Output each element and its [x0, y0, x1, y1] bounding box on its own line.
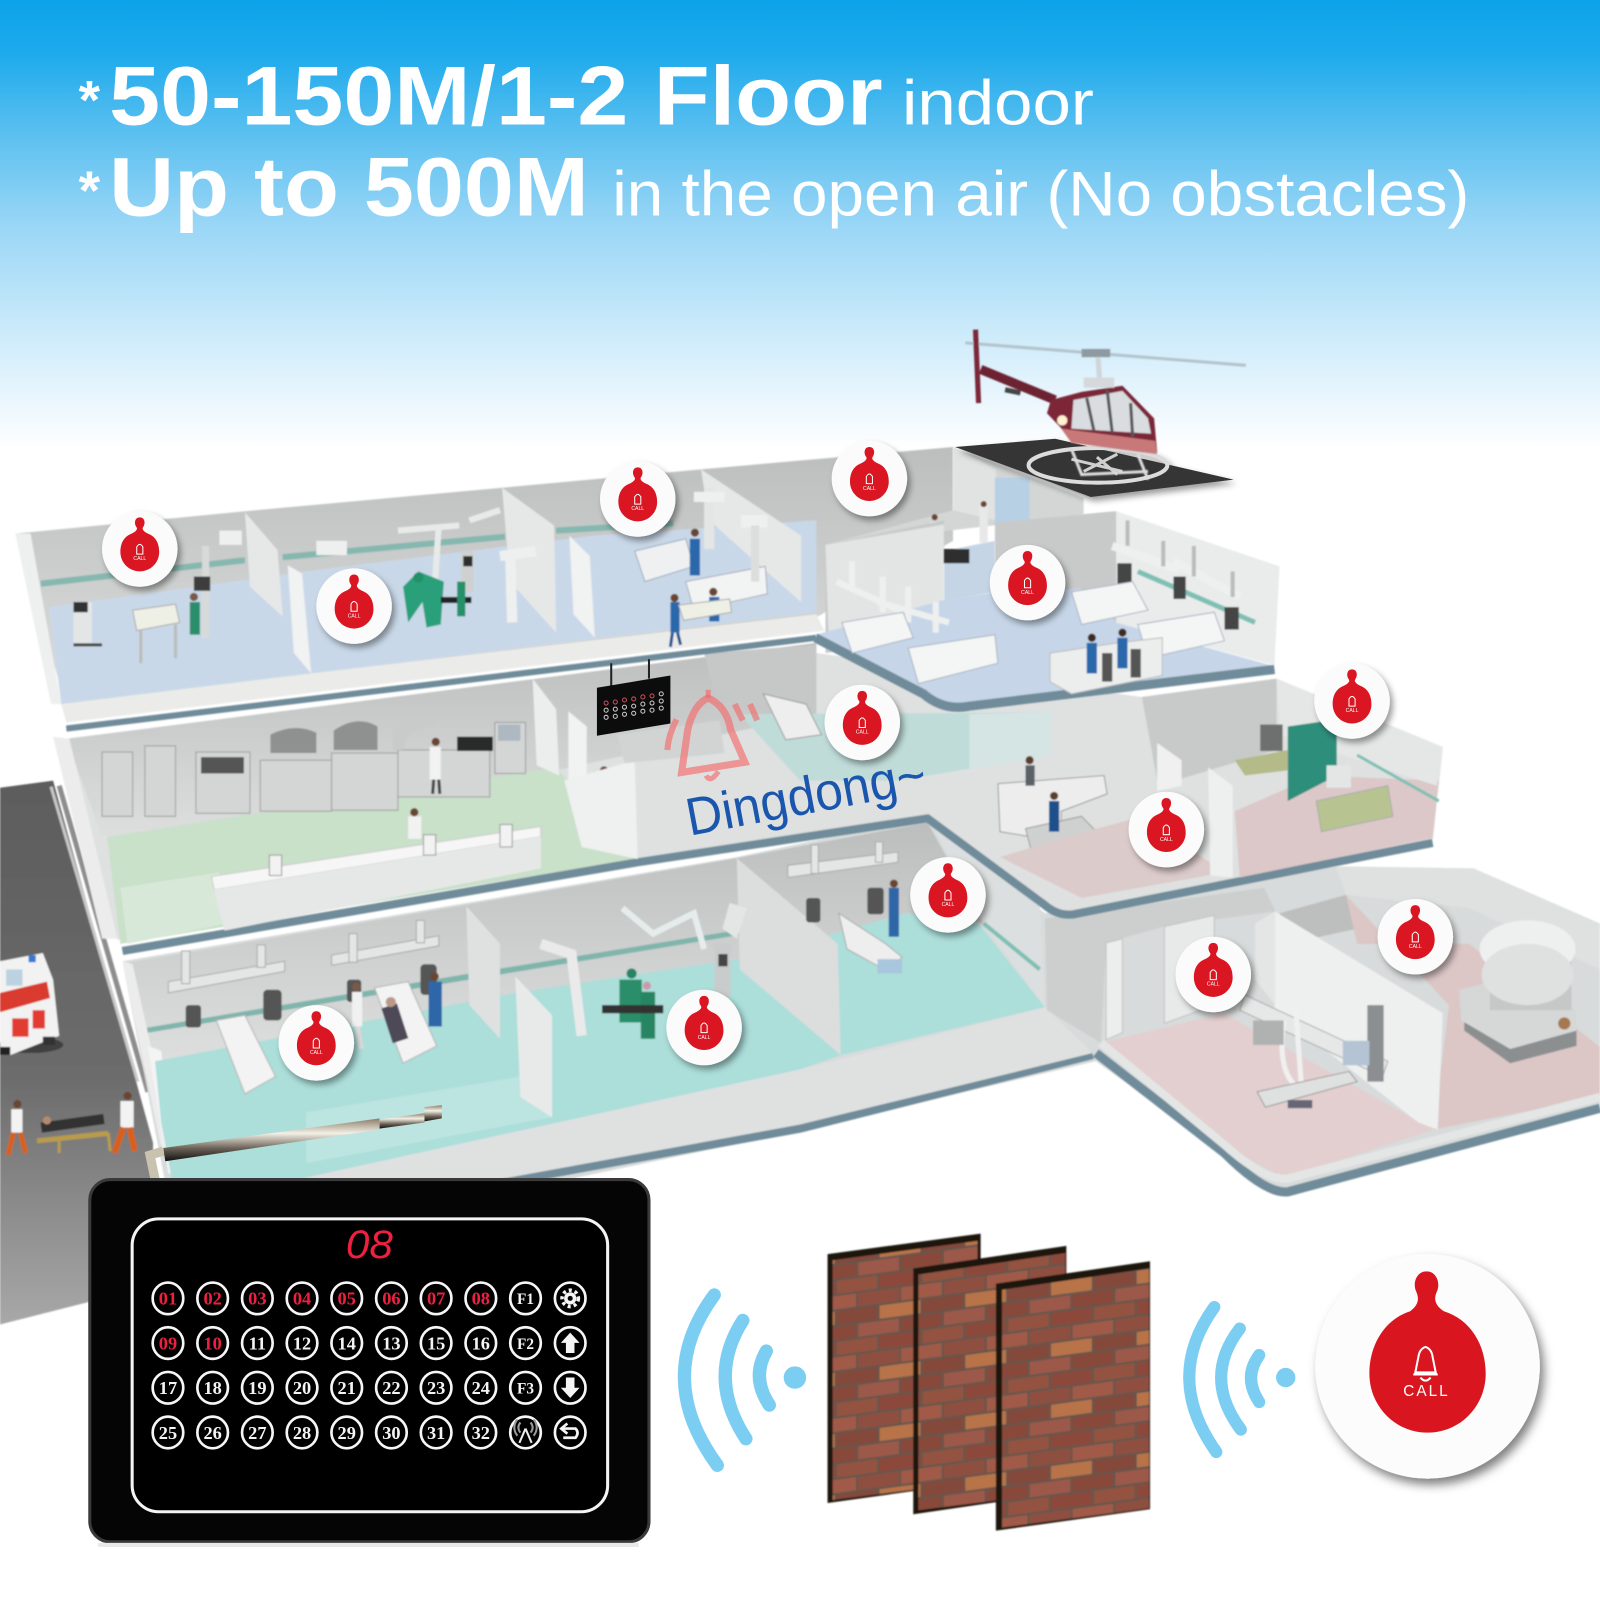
heading: range specifications: [79, 48, 1469, 233]
button labels idle: 32: [472, 1423, 490, 1443]
patient beds: [216, 913, 902, 1094]
button labels idle: 30: [382, 1423, 401, 1443]
blue floor: [49, 520, 816, 704]
road and ambulance area: [0, 781, 153, 1324]
button labels active: 02: [203, 1289, 222, 1309]
call button 2: [316, 568, 392, 644]
icon: return arrow: [561, 1423, 578, 1438]
button labels active: 05: [338, 1289, 356, 1309]
call button 9: CALL: [942, 902, 954, 908]
button labels active: 10: [203, 1333, 222, 1353]
call button 7: CALL: [1346, 708, 1359, 714]
brick wall 3: [996, 1261, 1150, 1531]
building: icu wing: [815, 511, 1280, 708]
heading: range specifications: 50-150M/1-2 Floor: [109, 48, 883, 142]
call button 1: [102, 511, 178, 587]
nurse desk: [1050, 629, 1162, 694]
teal floor: [155, 913, 1045, 1189]
ceiling booms: [837, 520, 1240, 633]
button labels idle: 26: [203, 1423, 222, 1443]
partitions: [245, 469, 801, 673]
button labels idle: 14: [338, 1333, 356, 1353]
icon: up arrow: [561, 1333, 580, 1353]
call button 6: CALL: [856, 730, 869, 736]
middle partitions: [533, 645, 816, 859]
call button 5: [990, 545, 1065, 620]
button labels idle: 16: [472, 1333, 490, 1353]
brick wall panels: [828, 1234, 1150, 1531]
button labels idle: 19: [248, 1378, 267, 1398]
button labels idle: F2: [517, 1336, 534, 1353]
heading: range specifications: in the open air (No obstacles): [612, 159, 1469, 229]
button labels idle: 20: [293, 1378, 311, 1398]
teal wall stripes: [41, 523, 673, 584]
signal waves from receiver: [684, 1295, 806, 1465]
pink treatment rooms: [1000, 679, 1443, 898]
staff figures: [352, 880, 899, 1049]
button labels active: 06: [382, 1289, 401, 1309]
sky gradient background: [0, 0, 1600, 449]
button labels idle: 15: [427, 1333, 445, 1353]
heading: range specifications: *: [79, 68, 101, 130]
button labels active: 01: [159, 1289, 177, 1309]
right wing walls and corridor: [1045, 888, 1276, 1043]
icu room 3: [635, 488, 767, 647]
building: middle floor: [53, 643, 1443, 951]
large call button: [1315, 1254, 1540, 1479]
reception counter: [211, 824, 541, 931]
call button 8: [1129, 792, 1204, 867]
building: top floor left wing: [15, 447, 953, 729]
call button 10: CALL: [1207, 982, 1220, 988]
heading: range specifications: *: [79, 159, 101, 221]
signal waves from call button: [1189, 1307, 1295, 1452]
button labels idle: 31: [427, 1423, 445, 1443]
call button 11: CALL: [1409, 944, 1422, 950]
call button 10: [1176, 937, 1251, 1012]
button labels idle: 27: [248, 1423, 267, 1443]
icon: antenna signal: [514, 1419, 537, 1443]
green floor: [107, 767, 635, 944]
button labels idle: 24: [472, 1378, 490, 1398]
receiver on the wall: [597, 659, 670, 736]
glass room with bed: [740, 694, 1051, 781]
lab equipment: [102, 722, 526, 816]
icon: ambulance: [0, 953, 63, 1055]
button labels idle: 25: [159, 1423, 177, 1443]
left wall: [53, 737, 117, 939]
icon: paramedics with stretcher: [8, 1092, 135, 1155]
call button 4: [832, 441, 907, 516]
slab edge: [122, 818, 1433, 951]
surgery team and lights: [541, 903, 747, 1039]
button labels active: [159, 1289, 490, 1353]
button labels idle: 12: [293, 1333, 311, 1353]
call button 13: CALL: [698, 1035, 711, 1041]
icon: x-ray machine: [1240, 995, 1388, 1108]
icu beds: [842, 582, 1224, 684]
back wall: [124, 822, 984, 1061]
button labels idle: 17: [159, 1378, 177, 1398]
button labels idle: 29: [338, 1423, 356, 1443]
icon: ringing bell: [667, 690, 757, 779]
nurse station: [998, 756, 1122, 893]
call button 3: CALL: [631, 506, 644, 512]
button labels idle: 28: [293, 1423, 311, 1443]
dingdong label: Dingdong~: [681, 745, 931, 848]
icon: bell: [1413, 1347, 1438, 1381]
large call button: CALL: [1403, 1383, 1450, 1400]
low partition panels: [1106, 911, 1443, 1130]
corridor front edge: [296, 1055, 1093, 1220]
button labels idle: 21: [338, 1378, 356, 1398]
left wall: [122, 961, 173, 1148]
building: office behind icu: [826, 447, 1116, 602]
heading: range specifications: indoor: [902, 68, 1094, 138]
button grid: [153, 1283, 586, 1448]
icon: helicopter: [965, 330, 1246, 480]
call button 12: [279, 1005, 354, 1081]
call button 12: CALL: [310, 1050, 323, 1056]
call button 1: CALL: [133, 556, 146, 562]
button labels idle: 23: [427, 1378, 445, 1398]
call button 7: [1314, 663, 1390, 739]
monitors on wall: [186, 888, 884, 1028]
icon: antenna: [150, 1105, 442, 1180]
call button 3: [600, 461, 676, 537]
brick wall 2: [913, 1246, 1066, 1514]
brick wall 1: [828, 1234, 981, 1503]
button labels active: 09: [159, 1333, 177, 1353]
button labels active: 07: [427, 1289, 445, 1309]
heading: range specifications: Up to 500M: [109, 139, 589, 233]
button labels active: 08: [472, 1289, 490, 1309]
call button 9: [910, 857, 986, 933]
building: ground floor: [122, 816, 1600, 1235]
button labels idle: 13: [382, 1333, 401, 1353]
icon: down arrow: [561, 1378, 580, 1398]
button labels active: 04: [293, 1289, 311, 1309]
icu equipment room 1: [73, 531, 242, 663]
pager receiver panel: [90, 1180, 649, 1547]
call button 2: CALL: [348, 613, 361, 619]
pink rooms floor: [1101, 1013, 1434, 1179]
button labels active: 03: [248, 1289, 267, 1309]
front corridor strip: [61, 614, 824, 722]
call button 4: CALL: [863, 486, 876, 492]
right teal room wall: [928, 816, 1045, 1007]
icon: settings gear: [562, 1290, 578, 1307]
button labels idle: F1: [517, 1291, 534, 1308]
call button 5: CALL: [1021, 590, 1034, 596]
partition walls: [466, 906, 500, 1039]
button labels idle: 18: [203, 1378, 222, 1398]
button labels idle: [159, 1291, 534, 1443]
button labels idle: 22: [382, 1378, 401, 1398]
call button 8: CALL: [1160, 837, 1173, 843]
staff in white coats: [408, 738, 610, 839]
call button 13: [666, 990, 742, 1065]
operating room: [316, 510, 536, 628]
button labels idle: 11: [249, 1333, 266, 1353]
red button face: [1369, 1271, 1486, 1433]
call button 11: [1378, 899, 1453, 974]
icon: MRI scanner: [1459, 920, 1577, 1063]
button labels idle: F3: [517, 1380, 534, 1397]
call button 6: [824, 685, 900, 760]
medical booms: [168, 842, 898, 993]
digital display: 08: [346, 1223, 393, 1267]
helipad: [955, 439, 1234, 497]
